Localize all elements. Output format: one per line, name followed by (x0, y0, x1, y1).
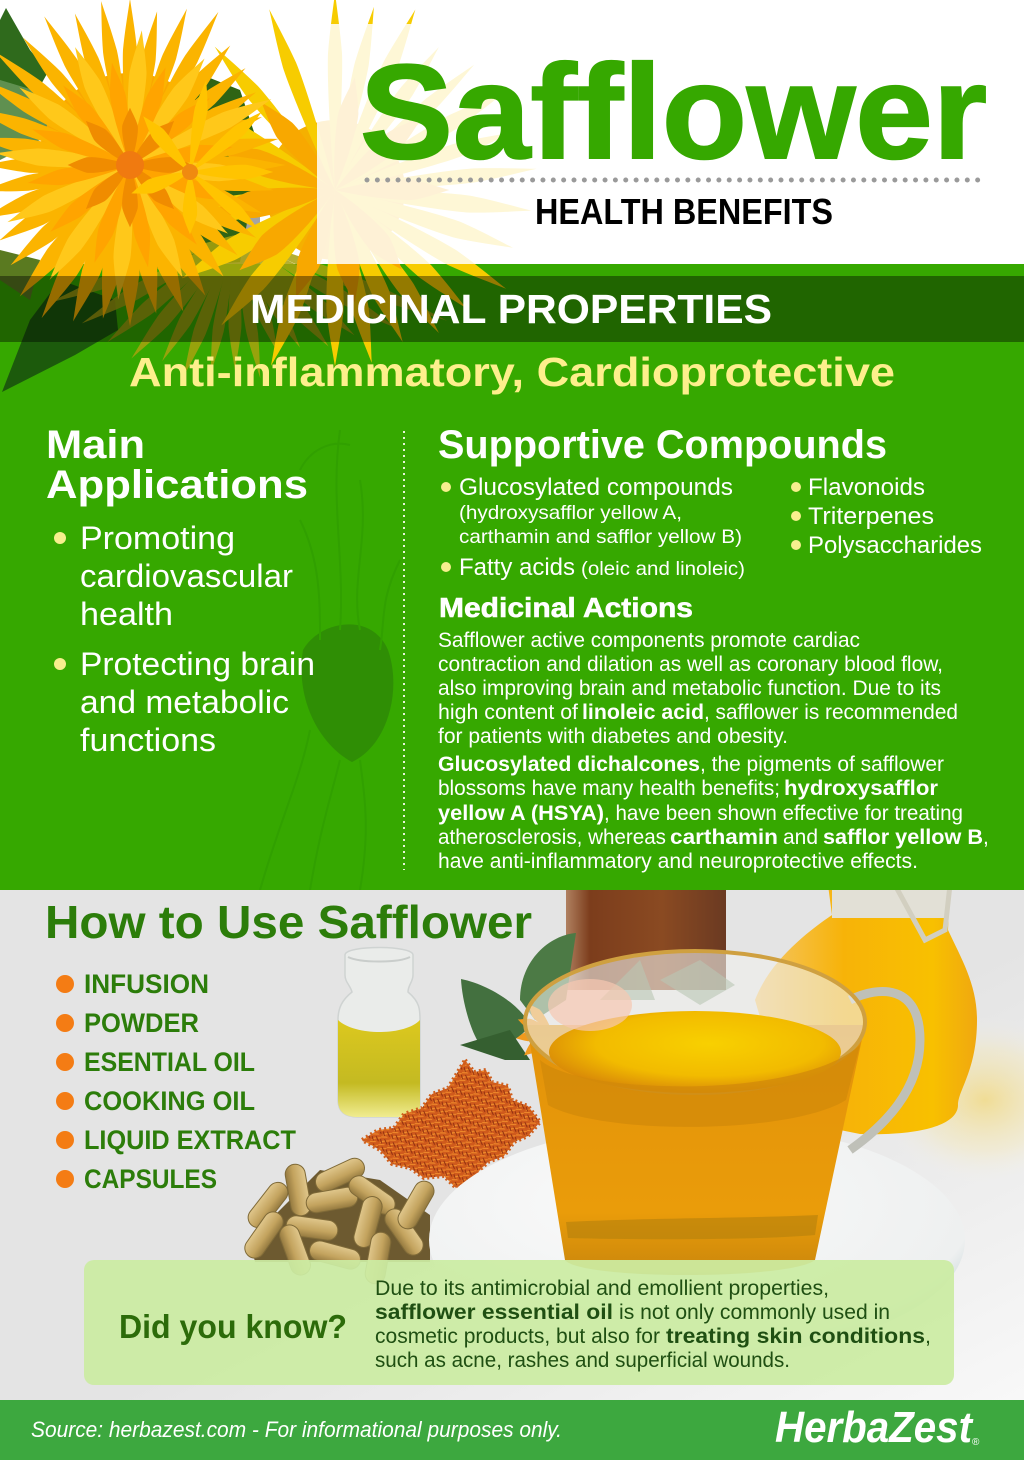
text: second paragraph: yellow A (HSYA) (438, 802, 604, 825)
use: capsules: CAPSULES (84, 1164, 217, 1194)
heading: main applications: Main (46, 423, 145, 467)
panel: green content background (0, 264, 1024, 890)
product photo collage (244, 890, 1024, 1284)
use: liquid extract: LIQUID EXTRACT (84, 1125, 296, 1155)
text: second paragraph: hydroxysafflor (784, 777, 938, 800)
callout heading: Did you know? (119, 1308, 347, 1345)
compound: polysaccharides: Polysaccharides (808, 532, 982, 559)
panel: medicinal actions (438, 592, 989, 873)
compound: triterpenes: Triterpenes (808, 503, 934, 530)
compound: fatty acids: Fatty acids (459, 554, 575, 581)
compound: glucosylated: carthamin and safflor yellow B) (459, 526, 742, 548)
compound: fatty acids: (oleic and linoleic) (581, 558, 745, 580)
text: second paragraph: , the pigments of safflower (700, 753, 944, 776)
compound: flavonoids: Flavonoids (808, 474, 925, 501)
leaves (0, 8, 260, 392)
translucent title panel (317, 24, 1024, 264)
application: brain and metabolic (54, 646, 315, 758)
use: cooking oil: COOKING OIL (84, 1086, 255, 1116)
callout text: cosmetic products, but also for (375, 1324, 660, 1348)
text: second paragraph: have anti-inflammatory and neuroprotective effects. (438, 850, 918, 873)
application: cardiovascular: health (80, 596, 173, 632)
subtitle: HEALTH BENEFITS (535, 191, 833, 232)
panel: how to use background (0, 890, 1024, 1400)
list: uses (56, 969, 296, 1194)
background anatomy figure (260, 430, 400, 890)
tea mug (525, 951, 865, 1275)
dried safflower petals (362, 1060, 540, 1188)
panel: main applications (46, 423, 315, 758)
callout: did you know (84, 1260, 954, 1385)
text: first paragraph: , safflower is recommended (704, 701, 958, 724)
text: second paragraph: , (983, 826, 989, 849)
heading: supportive compounds: Supportive Compounds (438, 423, 887, 467)
footer source: Source: herbazest.com - For informational purposes only. (31, 1417, 562, 1442)
lower withered petals (47, 229, 450, 379)
properties line: Anti-inflammatory, Cardioprotective (129, 349, 895, 395)
callout text: treating skin conditions (666, 1324, 925, 1348)
callout text: safflower essential oil (375, 1300, 613, 1324)
footer bar (0, 1400, 1024, 1460)
essential oil vial (338, 948, 420, 1117)
callout text: is not only commonly used in (619, 1300, 890, 1324)
text: first paragraph: high content of (438, 701, 578, 724)
title: Safflower (360, 38, 987, 187)
text: first paragraph: linoleic acid (582, 701, 704, 724)
compound: fatty acids (441, 554, 745, 581)
orange blossom behind mug (516, 1006, 550, 1056)
leaves (460, 933, 576, 1060)
compound: glucosylated (441, 474, 742, 548)
mug handle (850, 991, 920, 1150)
text: second paragraph: blossoms have many health benefits; (438, 777, 780, 800)
logo: HerbaZest: HerbaZest (775, 1403, 974, 1452)
callout text (375, 1276, 931, 1372)
text: second paragraph: , have been shown effective for treating (604, 802, 963, 825)
use: infusion: INFUSION (84, 969, 209, 999)
second flower, right (169, 0, 537, 369)
heading: how to use: How to Use Safflower (45, 896, 532, 948)
text: first paragraph: also improving brain and metabolic function. Due to its (438, 677, 941, 700)
text: first paragraph: for patients with diabetes and obesity. (438, 725, 788, 748)
yellow glow (914, 1037, 1024, 1164)
oil carafe (755, 885, 977, 1134)
dotted title divider (367, 178, 980, 182)
heading: main applications (46, 423, 308, 507)
application: brain and metabolic: Protecting brain (80, 646, 315, 682)
heading: medicinal actions: Medicinal Actions (439, 592, 693, 623)
application: cardiovascular: cardiovascular (80, 558, 293, 594)
small inner flower (129, 79, 273, 234)
text: first paragraph: Safflower active components promote cardiac (438, 629, 860, 652)
text: first paragraph (438, 629, 958, 748)
application: cardiovascular: Promoting (80, 520, 235, 556)
use: essential oil: ESENTIAL OIL (84, 1047, 255, 1077)
saucer (429, 1142, 964, 1273)
main flower (0, 0, 286, 326)
text: second paragraph: atherosclerosis, whereas (438, 826, 666, 849)
panel: supportive compounds (438, 423, 982, 581)
callout text: , (925, 1324, 931, 1348)
compound: glucosylated: Glucosylated compounds (459, 474, 733, 501)
dark heading band (0, 276, 1024, 342)
capsules (241, 1155, 438, 1285)
callout text: Due to its antimicrobial and emollient properties, (375, 1276, 829, 1300)
text: second paragraph (438, 753, 989, 873)
heading: main applications: Applications (46, 463, 308, 507)
dotted column divider (403, 431, 405, 870)
illustration: safflower blossoms (0, 0, 537, 392)
heading: medicinal properties: MEDICINAL PROPERTIES (250, 286, 772, 332)
application: brain and metabolic: functions (80, 722, 216, 758)
text: second paragraph: safflor yellow B (823, 826, 983, 849)
application: cardiovascular (54, 520, 293, 632)
amber bottle (566, 880, 726, 990)
text: second paragraph: and (783, 826, 818, 849)
text: second paragraph: Glucosylated dichalcones (438, 753, 700, 776)
text: second paragraph: carthamin (670, 826, 778, 849)
use: powder: POWDER (84, 1008, 199, 1038)
compound: glucosylated: (hydroxysafflor yellow A, (459, 502, 682, 524)
text: first paragraph: contraction and dilation as well as coronary blood flow, (438, 653, 943, 676)
logo: HerbaZest: ® (972, 1437, 980, 1448)
application: brain and metabolic: and metabolic (80, 684, 289, 720)
callout text: such as acne, rashes and superficial wounds. (375, 1348, 790, 1372)
